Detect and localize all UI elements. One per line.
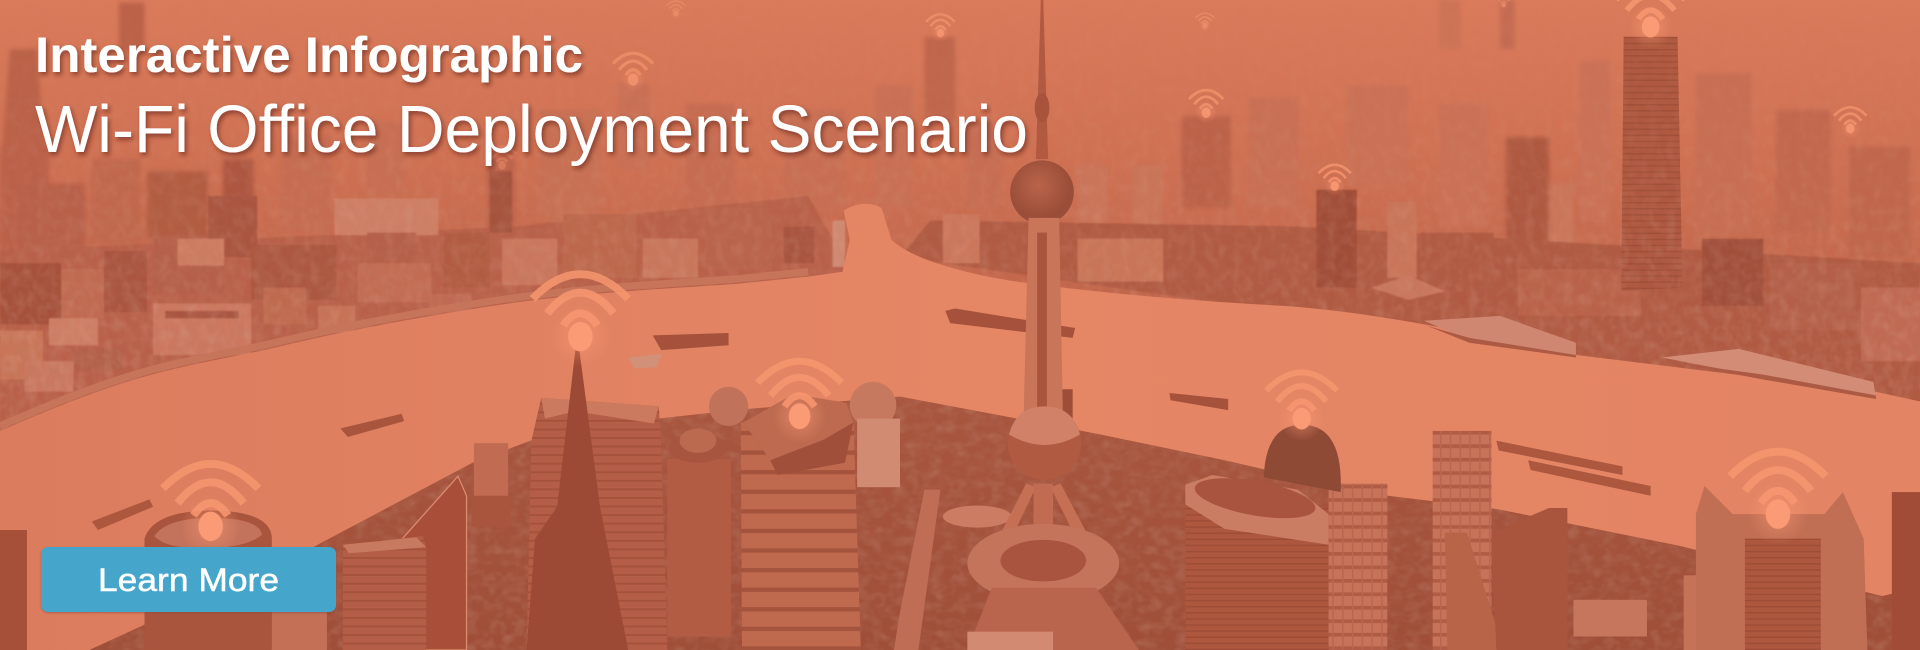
near shoreline and foreground ground (0, 397, 1920, 650)
title: Interactive Infographic: Interactive Infographic (35, 27, 583, 83)
wifi signal icon: dim behind title (488, 147, 516, 174)
Oriental Pearl tower (967, 0, 1139, 650)
river (0, 204, 1920, 650)
wifi signal icon: far centre (926, 14, 955, 42)
texture: dense city grain (0, 136, 1920, 430)
ships on the river (92, 308, 1876, 530)
quay along the left bank (0, 272, 808, 426)
wifi signal icon: far left (613, 53, 653, 92)
subtitle: Wi-Fi Office Deployment Scenario: Wi-Fi Office Deployment Scenario (35, 92, 1028, 167)
wifi signal icon: far right (1834, 107, 1866, 139)
mid-ground land and waterfront buildings (0, 171, 1920, 441)
texture: foreground trees (0, 392, 1920, 650)
wifi signal icon: dome (1266, 372, 1337, 441)
wifi signal icon: mid right (1318, 165, 1351, 196)
wifi signal icon: tall tower (1616, 0, 1685, 49)
button: Learn More (41, 547, 336, 612)
wifi signal icon: small distant (1195, 13, 1214, 32)
wifi signal icon: small top (666, 1, 685, 20)
wifi signal icon: spire (533, 274, 628, 367)
wifi signal icon: large right (1730, 452, 1826, 545)
button: Learn More: Learn More (98, 562, 279, 598)
wifi signal icon: octagonal tower (758, 361, 842, 443)
foreground skyscrapers (0, 349, 1920, 650)
wifi signal icon: far centre right (1189, 90, 1223, 124)
wifi signal icon: large left (163, 464, 258, 557)
far city skyline (0, 0, 1910, 257)
tall dark tower (1621, 37, 1682, 291)
wifi signal icon: top edge (1496, 0, 1511, 10)
